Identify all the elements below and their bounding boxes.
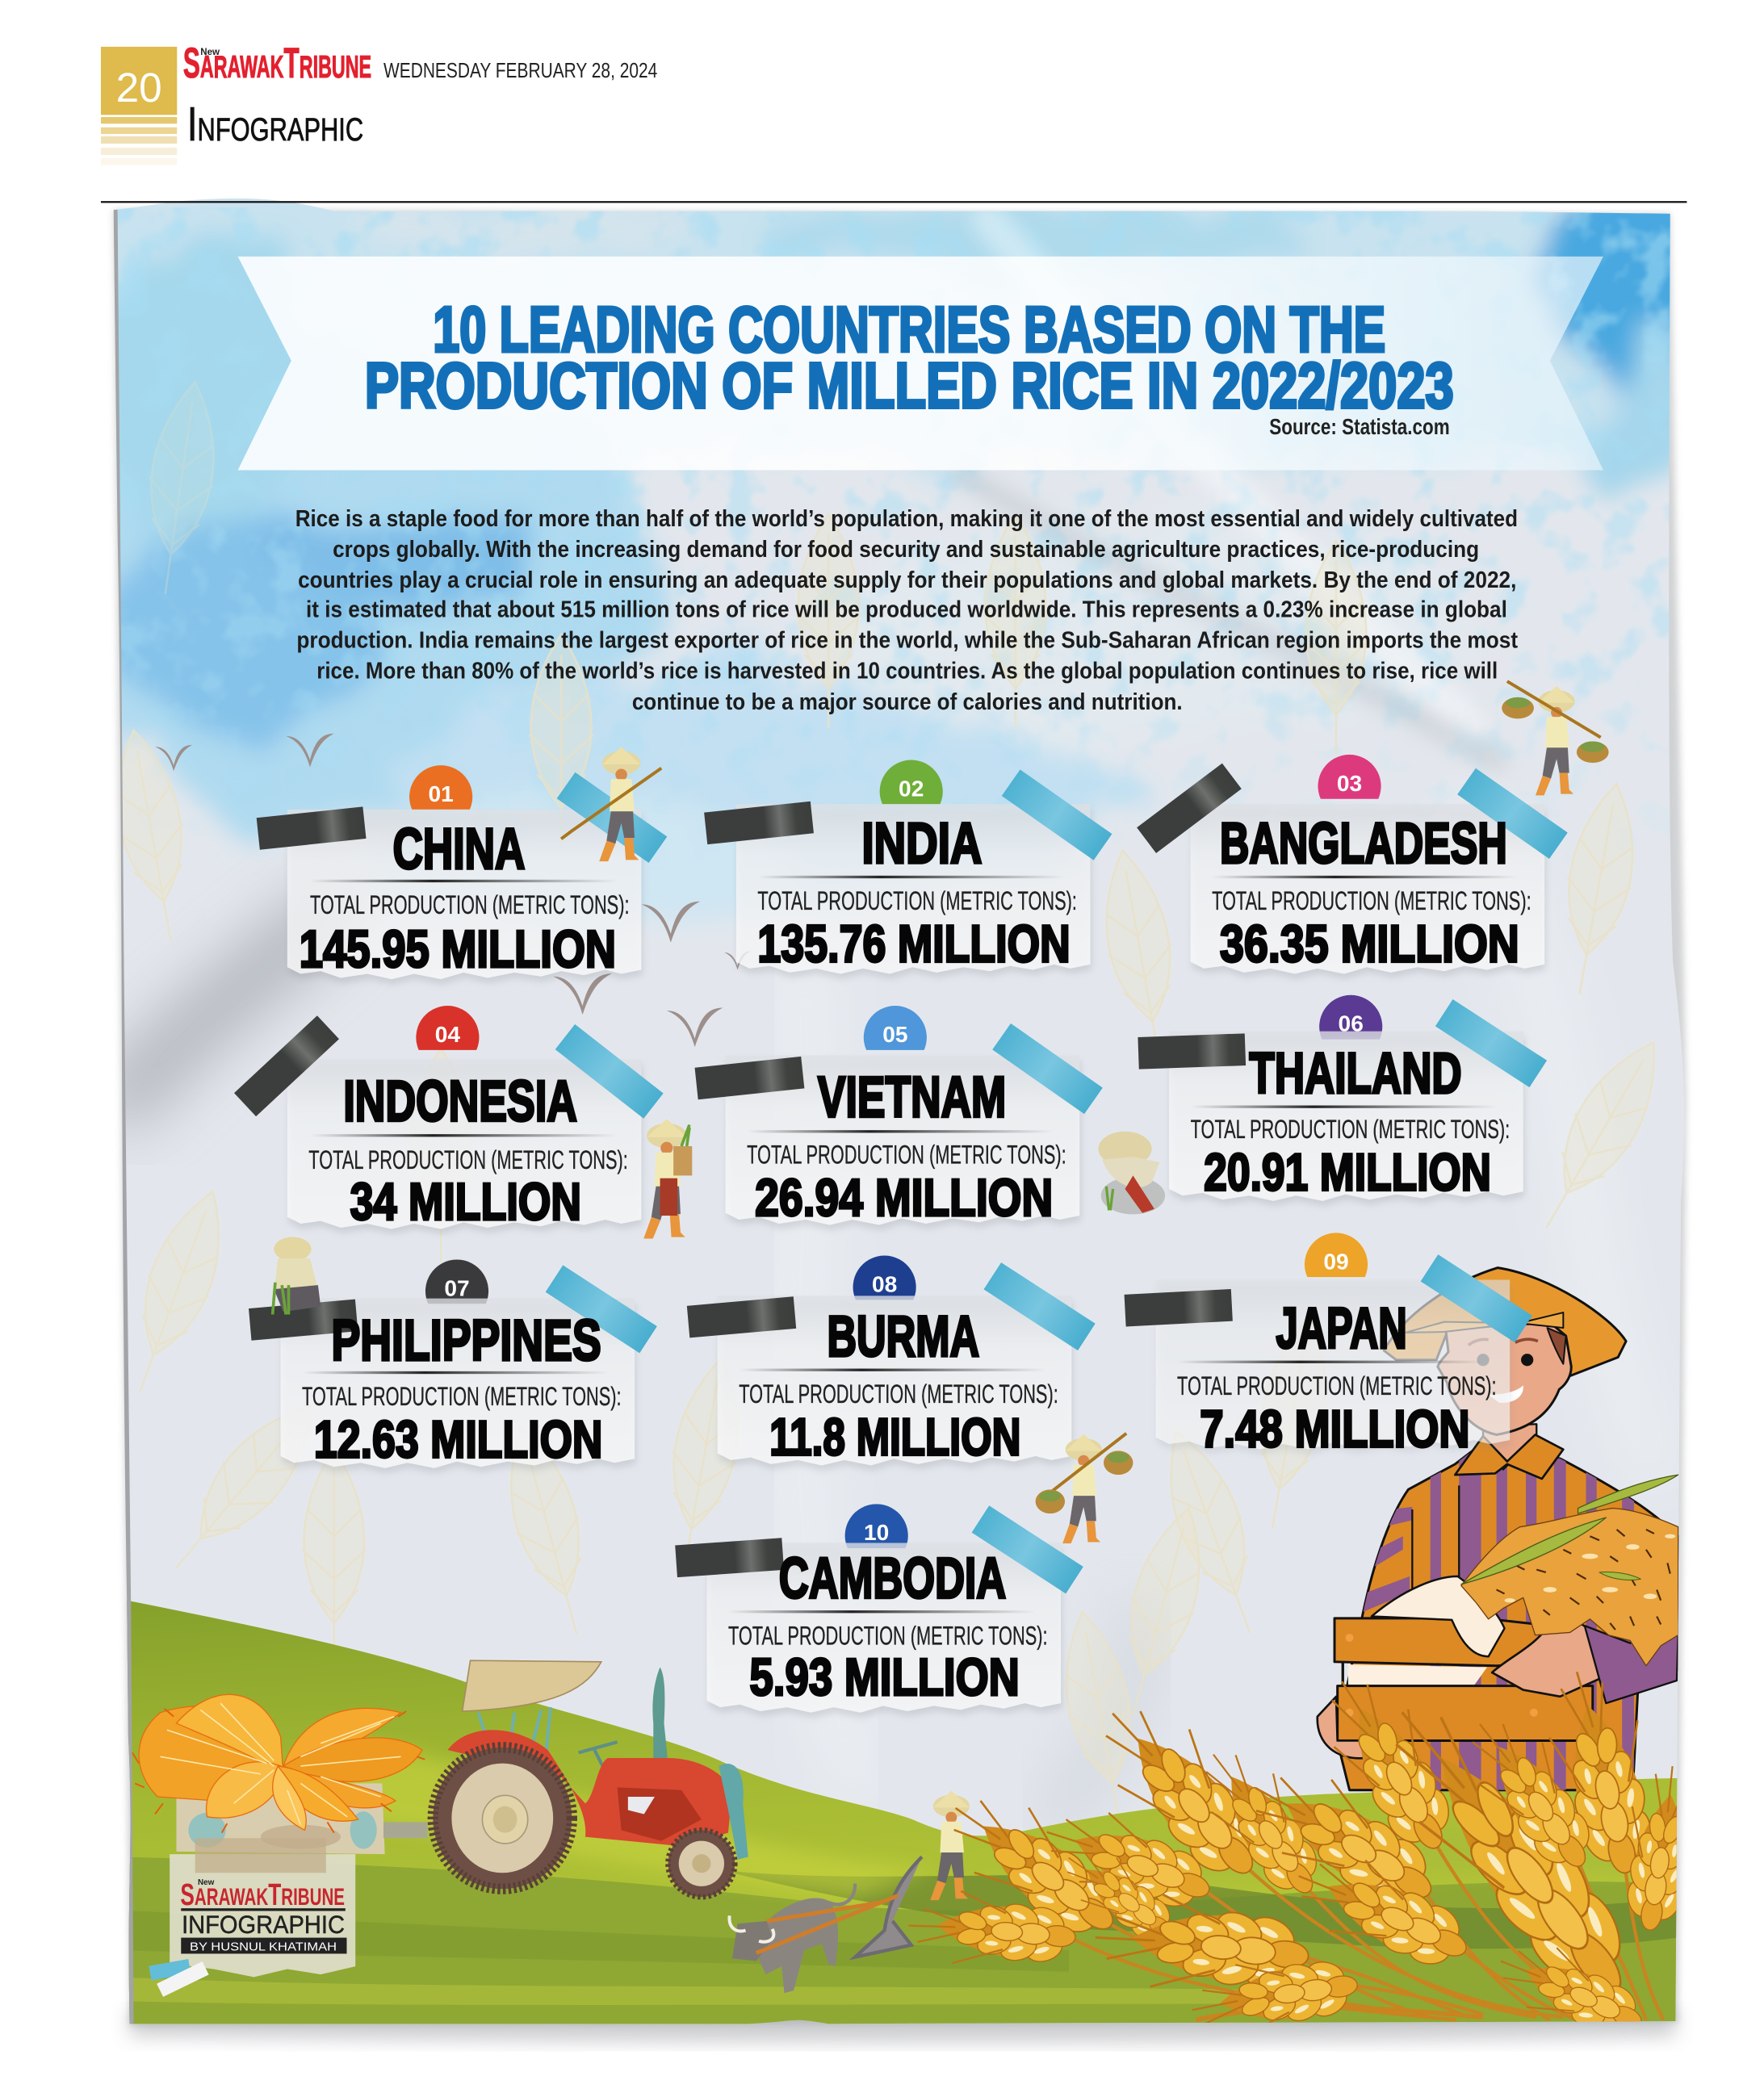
intro paragraph: crops globally. With the increasing demand for food security and sustainable agriculture practices, rice-producing: [333, 537, 1479, 563]
steering wheel: [579, 1742, 618, 1777]
farmer head: [1438, 1322, 1571, 1434]
card 01 China: 145.95 MILLION: [300, 920, 616, 978]
intro paragraph: countries play a crucial role in ensuring an adequate supply for their populations and global markets. By the end of 2022,: [298, 567, 1516, 593]
intro paragraph: it is estimated that about 515 million tons of rice will be produced worldwide. This represents a 0.23% increase in global: [306, 597, 1507, 623]
intro paragraph: [295, 506, 1518, 715]
card 07 Philippines: PHILIPPINES: [331, 1309, 601, 1373]
sleeve cuff: [1585, 1626, 1678, 1703]
intro paragraph: continue to be a major source of calories and nutrition.: [632, 689, 1183, 715]
card 03 Bangladesh: BANGLADESH: [1220, 812, 1507, 876]
poster left edge: [114, 210, 130, 2024]
card 04 Indonesia: TOTAL PRODUCTION (METRIC TONS):: [308, 1145, 628, 1174]
card 06 Thailand: TOTAL PRODUCTION (METRIC TONS):: [1191, 1115, 1510, 1144]
card 07 Philippines: 07: [444, 1275, 470, 1300]
stamp title: INFOGRAPHIC: [182, 1911, 345, 1939]
buffalo head: [732, 1921, 773, 1961]
card 08 Burma: TOTAL PRODUCTION (METRIC TONS):: [739, 1379, 1058, 1409]
card 05 Vietnam: 26.94 MILLION: [755, 1169, 1053, 1227]
section title: INFOGRAPHIC: [187, 97, 363, 151]
masthead: [101, 40, 657, 165]
intro paragraph: production. India remains the largest exporter of rice in the world, while the Sub-Saharan African region imports the most: [296, 628, 1518, 654]
farmer neck: [1483, 1424, 1536, 1469]
stamp logo: SARAWAKTRIBUNE: [180, 1878, 345, 1912]
card 10 Cambodia: [675, 1504, 1083, 1718]
card 05 Vietnam: TOTAL PRODUCTION (METRIC TONS):: [747, 1141, 1066, 1170]
card 04 Indonesia: [234, 1006, 664, 1234]
canopy: [463, 1660, 601, 1770]
stamp byline: [181, 1938, 346, 1953]
title banner: [238, 257, 1603, 471]
page number block: 20: [116, 65, 162, 111]
rice bundle: [1461, 1475, 1678, 1666]
poster background: [123, 199, 1684, 1836]
ploughing farmer: [930, 1791, 970, 1900]
card 09 Japan: 7.48 MILLION: [1200, 1400, 1470, 1458]
poster: [113, 199, 1684, 2024]
card 06 Thailand: 20.91 MILLION: [1204, 1144, 1491, 1202]
card 03 Bangladesh: [1137, 755, 1568, 979]
buffalo and plough: [729, 1856, 922, 1993]
card 03 Bangladesh: 36.35 MILLION: [1220, 915, 1519, 973]
card 09 Japan: TOTAL PRODUCTION (METRIC TONS):: [1177, 1371, 1497, 1400]
card 06 Thailand: 06: [1339, 1011, 1364, 1036]
buffalo tail: [828, 1884, 855, 1904]
card 02 India: 135.76 MILLION: [757, 915, 1071, 973]
card 04 Indonesia: 04: [435, 1022, 460, 1047]
small farmer with hoe: [561, 747, 661, 861]
card 08 Burma: 11.8 MILLION: [769, 1408, 1020, 1466]
big wheel: [433, 1748, 572, 1889]
farmer hat: [1384, 1268, 1626, 1376]
card 08 Burma: 08: [872, 1271, 897, 1296]
stamp rule: [181, 1908, 346, 1911]
pole-carrying farmer: [1036, 1434, 1133, 1543]
top rule: [101, 201, 1686, 203]
buffalo horns: [729, 1915, 773, 1942]
card 08 Burma: BURMA: [827, 1305, 979, 1369]
grille: [719, 1764, 748, 1860]
card 08 Burma: [687, 1256, 1096, 1471]
body: [447, 1730, 732, 1846]
tractor and trailer: [132, 1660, 748, 1897]
farmer collar: [1455, 1434, 1563, 1479]
ground: hills and fields: [120, 1599, 1683, 2044]
stamp small tape: [149, 1959, 209, 1997]
card 05 Vietnam: VIETNAM: [818, 1066, 1006, 1130]
page number block: [101, 47, 177, 165]
card 07 Philippines: 12.63 MILLION: [314, 1411, 602, 1469]
small farmer with basket: [643, 1119, 692, 1239]
newspaper logo: SARAWAKTRIBUNE: [183, 40, 371, 87]
card 02 India: 02: [899, 776, 924, 801]
card 01 China: TOTAL PRODUCTION (METRIC TONS):: [310, 890, 630, 919]
card 05 Vietnam: [695, 1006, 1103, 1230]
bending farmer: [1098, 1132, 1165, 1214]
poster shadow: [114, 210, 1686, 2042]
plough: [855, 1856, 922, 1957]
big farmer illustration: [1318, 1268, 1678, 1803]
card 10 Cambodia: 10: [864, 1520, 889, 1545]
trailer: [176, 1783, 428, 1854]
plough shafts: [756, 1895, 898, 1953]
buffalo body: [756, 1898, 838, 1993]
foreground wheat stalks: [906, 1660, 1711, 2054]
farmer hands: [1318, 1610, 1603, 1758]
intro paragraph: Rice is a staple food for more than half of the world’s population, making it one of the most essential and widely cultivated: [295, 506, 1518, 532]
card 07 Philippines: TOTAL PRODUCTION (METRIC TONS):: [302, 1382, 622, 1411]
hay pile: [132, 1694, 425, 1833]
crouching farmer: [273, 1237, 321, 1315]
watercolor wash: [113, 199, 1670, 925]
stamp logo: New: [198, 1878, 215, 1887]
card 01 China: 01: [429, 781, 454, 806]
card 04 Indonesia: 34 MILLION: [350, 1173, 581, 1231]
card 02 India: TOTAL PRODUCTION (METRIC TONS):: [757, 886, 1077, 915]
small farmer with baskets top right: [1502, 681, 1609, 795]
title: 10 LEADING COUNTRIES BASED ON THE: [433, 293, 1385, 365]
stamp tape: [195, 1838, 326, 1873]
fabric folds: [127, 220, 1657, 1817]
card 09 Japan: [1125, 1233, 1532, 1458]
stamp byline: BY HUSNUL KHATIMAH: [190, 1940, 337, 1953]
card 01 China: CHINA: [393, 818, 525, 881]
card 03 Bangladesh: TOTAL PRODUCTION (METRIC TONS):: [1212, 886, 1531, 915]
title: PRODUCTION OF MILLED RICE IN 2022/2023: [365, 350, 1454, 421]
card 01 China: [257, 765, 667, 985]
watercolor mottling: [118, 207, 1670, 804]
card 09 Japan: 09: [1323, 1249, 1349, 1274]
card 04 Indonesia: INDONESIA: [343, 1070, 577, 1134]
card 05 Vietnam: 05: [882, 1022, 907, 1047]
source: Source: Statista.com: [1269, 414, 1450, 439]
newspaper stamp card: [149, 1838, 355, 1997]
title: [365, 293, 1454, 421]
farmer shirt: [1336, 1442, 1678, 1803]
card 02 India: [704, 760, 1112, 979]
crate and cloth: [1335, 1576, 1593, 1740]
wheat watermarks: [102, 378, 1681, 1828]
date: WEDNESDAY FEBRUARY 28, 2024: [383, 58, 657, 82]
card 02 India: INDIA: [861, 812, 982, 876]
card 10 Cambodia: 5.93 MILLION: [749, 1648, 1020, 1706]
intro paragraph: rice. More than 80% of the world’s rice is harvested in 10 countries. As the global population continues to rise, rice will: [316, 659, 1498, 684]
birds: [155, 734, 751, 1047]
card 06 Thailand: THAILAND: [1249, 1042, 1462, 1106]
exhaust: [652, 1667, 668, 1764]
newspaper logo: New: [200, 48, 220, 57]
card 10 Cambodia: TOTAL PRODUCTION (METRIC TONS):: [728, 1621, 1048, 1650]
card 07 Philippines: [249, 1259, 657, 1473]
small wheel: [668, 1830, 735, 1897]
card 06 Thailand: [1138, 995, 1547, 1206]
card 10 Cambodia: CAMBODIA: [779, 1547, 1006, 1610]
card 03 Bangladesh: 03: [1337, 771, 1362, 796]
card 09 Japan: JAPAN: [1276, 1297, 1407, 1361]
hat band: [1406, 1312, 1563, 1333]
